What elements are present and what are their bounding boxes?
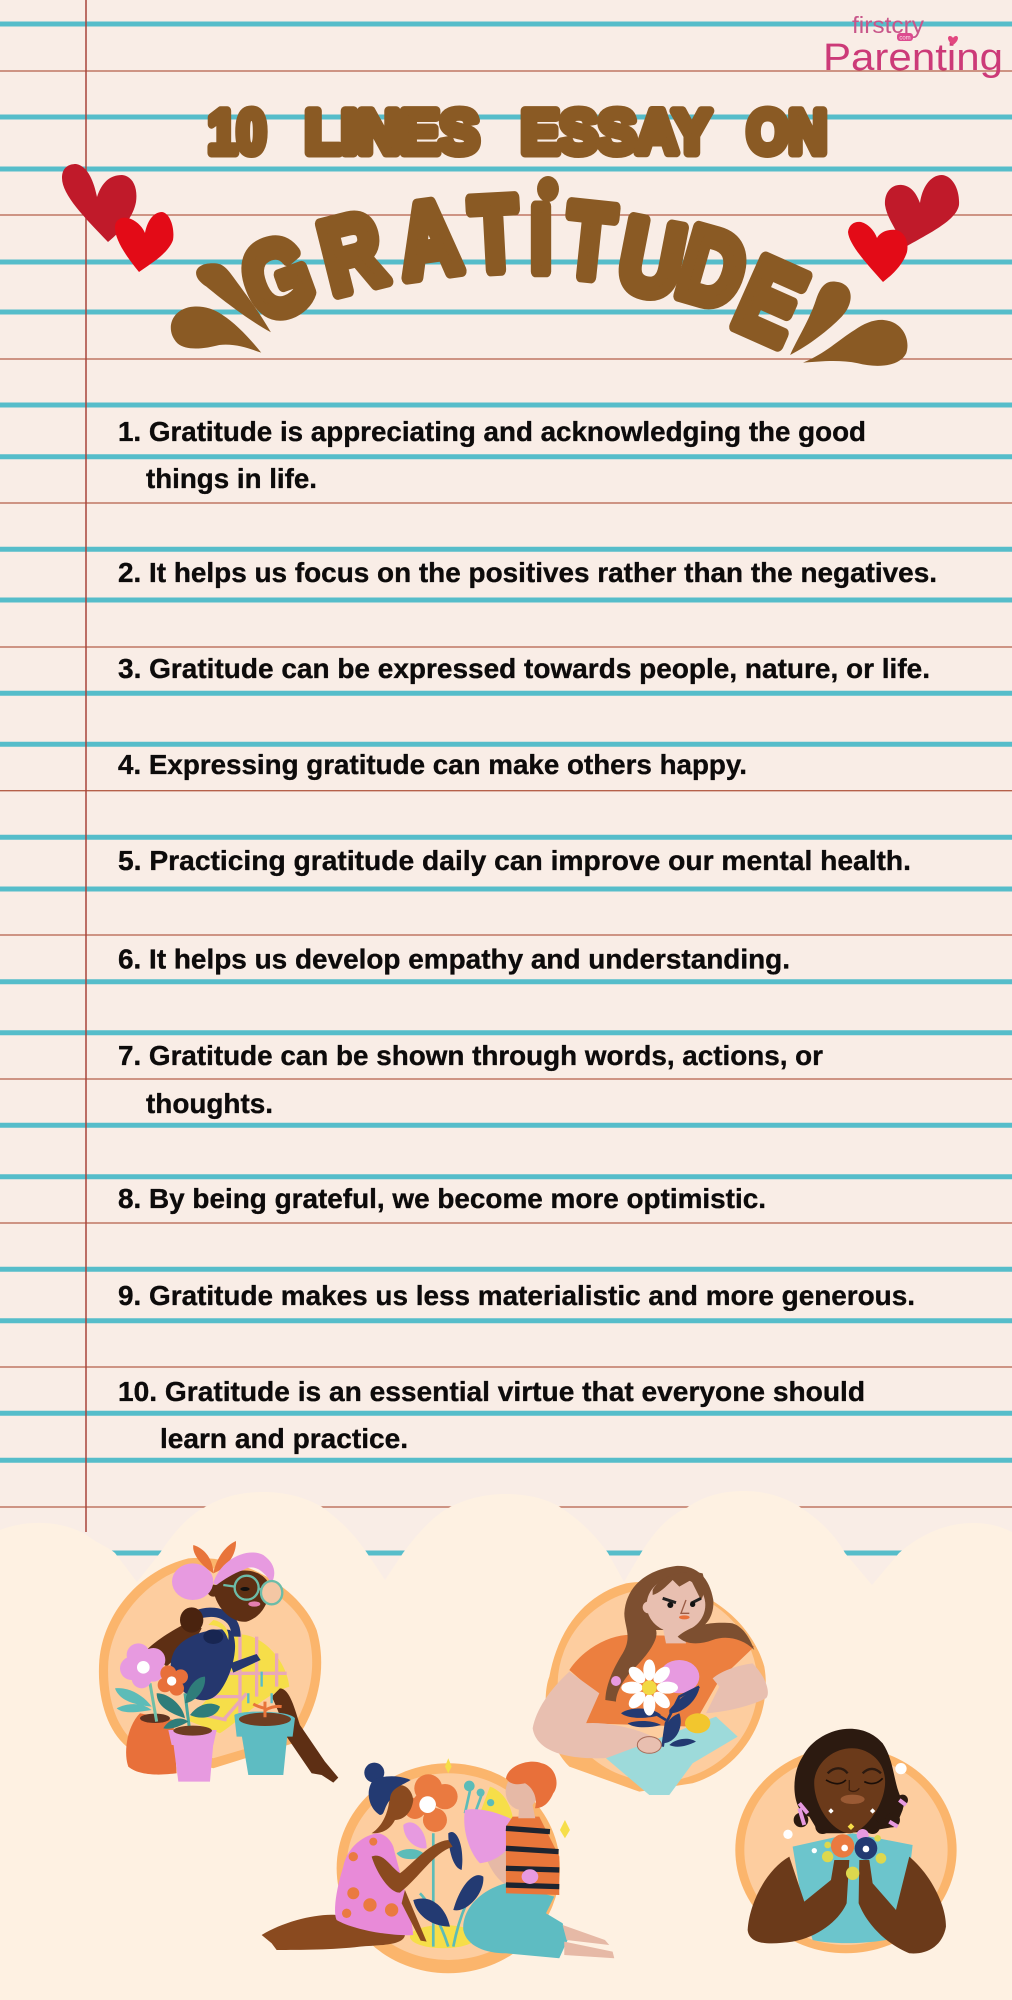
heading: gratitude arched: T (468, 177, 520, 294)
logo: FirstCry Parenting (823, 12, 1003, 79)
heading: 10 lines essay on: LINES (305, 98, 479, 166)
decorative title drops (171, 263, 907, 366)
line 4: 4. Expressing gratitude can make others happy. (118, 749, 747, 780)
icon: hearts right (848, 175, 959, 282)
line 2: 2. It helps us focus on the positives rather than the negatives. (118, 557, 937, 588)
heading: gratitude arched (227, 176, 821, 368)
logo: FirstCry Parenting: com (899, 36, 911, 42)
logo: FirstCry Parenting: firstcry (852, 12, 925, 38)
heading: gratitude arched: G (227, 212, 327, 343)
heading: gratitude arched: A (391, 177, 467, 300)
line 1: 1. Gratitude is appreciating and acknowledging the good (118, 416, 866, 447)
line 6: 6. It helps us develop empathy and understanding. (118, 944, 790, 974)
line 3: 3. Gratitude can be expressed towards people, nature, or life. (118, 653, 930, 684)
logo: FirstCry Parenting: Parenting (823, 37, 1003, 79)
heading: gratitude arched: D (667, 205, 758, 333)
line 5: 5. Practicing gratitude daily can improve our mental health. (118, 845, 911, 876)
heading: gratitude arched: R (309, 189, 395, 316)
icon: hearts left (62, 164, 173, 272)
line 9: 9. Gratitude makes us less materialistic and more generous. (118, 1280, 915, 1311)
essay lines (118, 416, 937, 1454)
heading: 10 lines essay on (208, 98, 827, 166)
line 10 (118, 1376, 865, 1454)
heading: gratitude arched: I (530, 187, 552, 292)
illustration: woman with eyes closed holding flowers (735, 1729, 957, 1953)
heading: gratitude arched: U (610, 196, 693, 321)
heading: gratitude arched: T (561, 183, 619, 302)
heading: 10 lines essay on: ESSAY (521, 98, 711, 166)
illustration: woman watering plants (99, 1541, 338, 1783)
line 10: learn and practice. (160, 1423, 408, 1454)
line 1: things in life. (146, 463, 317, 494)
line 7 (118, 1040, 823, 1119)
line 7: 7. Gratitude can be shown through words, actions, or (118, 1040, 823, 1071)
line 7: thoughts. (146, 1088, 273, 1119)
panel: scalloped cream footer (0, 1491, 1012, 2000)
illustration: woman holding daisy bouquet (533, 1566, 768, 1795)
line 8: 8. By being grateful, we become more optimistic. (118, 1183, 766, 1214)
heading: 10 lines essay on: 10 (208, 98, 266, 166)
line 10: 10. Gratitude is an essential virtue that everyone should (118, 1376, 865, 1407)
illustration: two friends with flowers (262, 1758, 614, 1973)
line 1 (118, 416, 866, 494)
heading: 10 lines essay on: ON (747, 98, 827, 166)
heading: gratitude arched: E (720, 234, 821, 368)
